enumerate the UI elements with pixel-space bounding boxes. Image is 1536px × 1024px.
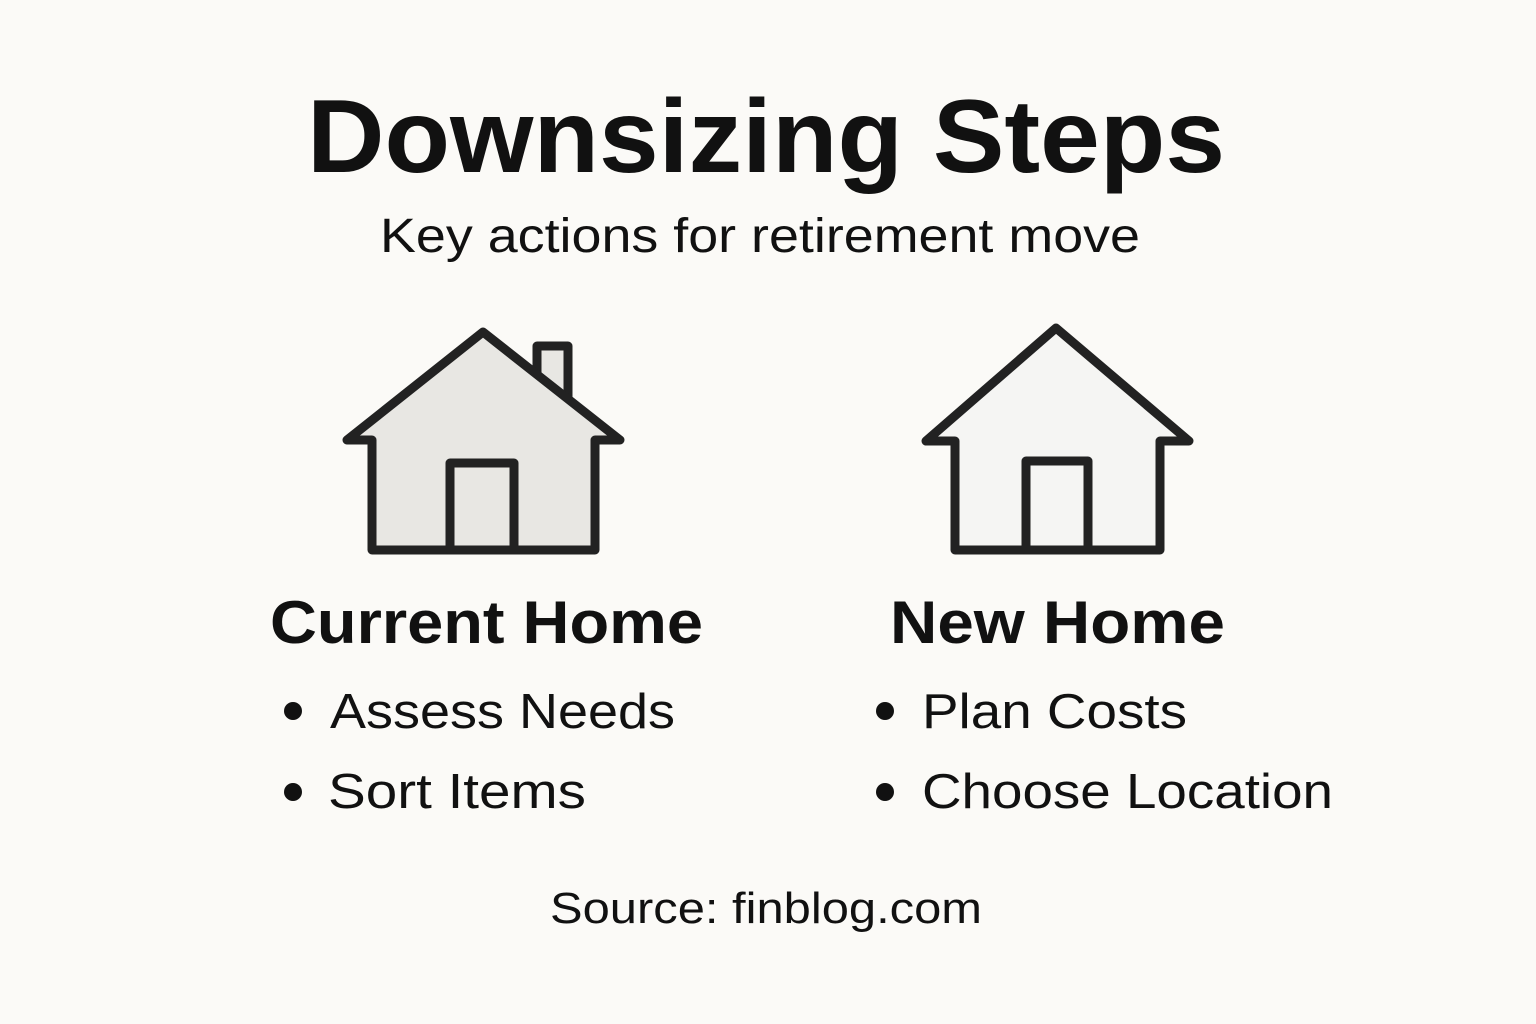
- list: current home: Sort Items: [328, 765, 586, 819]
- heading: new home: New Home: [890, 589, 1225, 656]
- list: new home: Plan Costs: [922, 685, 1187, 739]
- subtitle: Key actions for retirement move: [380, 210, 1140, 263]
- list: new home: Choose Location: [922, 765, 1333, 819]
- title: Downsizing Steps: [307, 79, 1225, 195]
- heading: current home: Current Home: [270, 589, 703, 656]
- list: new home: [876, 685, 1333, 819]
- icon: new home: [926, 328, 1189, 550]
- icon: current home: [347, 332, 620, 550]
- source: Source: finblog.com: [550, 884, 982, 933]
- list: current home: Assess Needs: [330, 685, 675, 739]
- list: current home: [284, 685, 675, 819]
